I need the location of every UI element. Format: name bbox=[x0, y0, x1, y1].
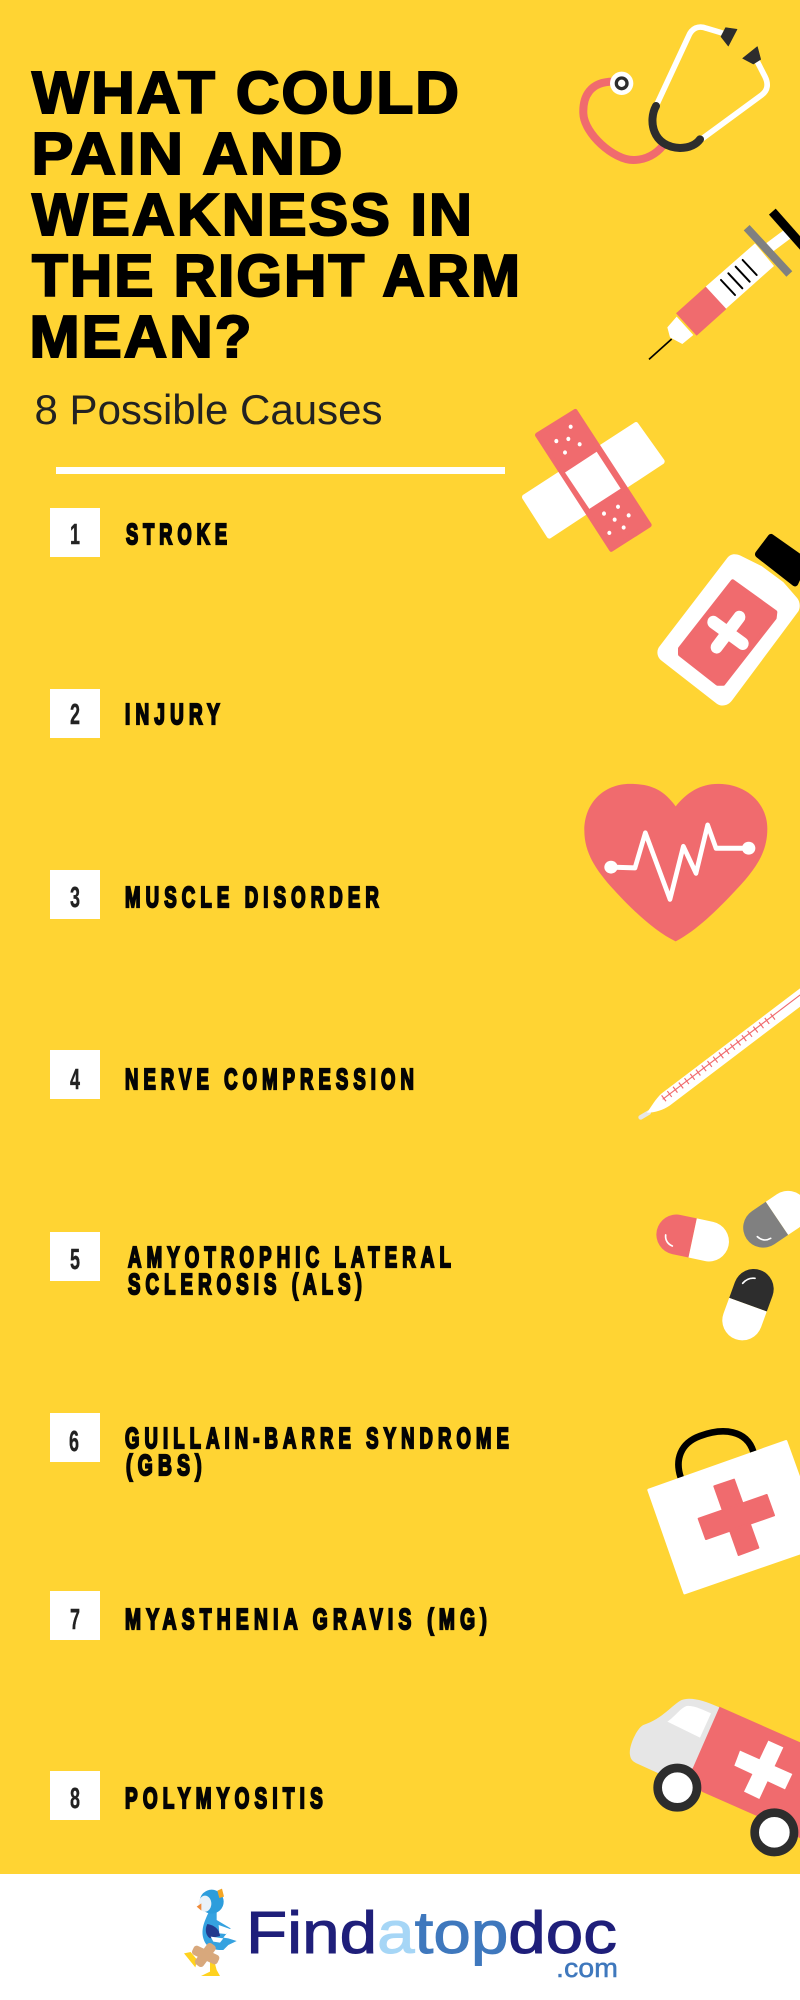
cause 2: injury: 2 bbox=[70, 699, 80, 731]
title: WHAT COULD bbox=[32, 60, 461, 126]
logo: Findatopdoc wordmark: .com bbox=[556, 1953, 618, 1983]
cause 5: amyotrophic lateral sclerosis: AMYOTROPHIC LATERAL bbox=[128, 1242, 456, 1274]
cause 5: amyotrophic lateral sclerosis bbox=[50, 1232, 456, 1301]
cause 1: stroke: STROKE bbox=[126, 519, 232, 551]
logo: Findatopdoc mascot bbox=[184, 1889, 237, 1976]
cause 6: guillain-barre syndrome: GUILLAIN-BARRE SYNDROME bbox=[125, 1423, 514, 1455]
cause 1: stroke: 1 bbox=[70, 519, 80, 551]
icon: grey and white pill bbox=[735, 1183, 800, 1255]
cause 6: guillain-barre syndrome: 6 bbox=[69, 1426, 79, 1458]
icon: medicine bottle bbox=[657, 537, 800, 706]
icon: red and white pill bbox=[653, 1211, 733, 1265]
title: WEAKNESS IN bbox=[32, 182, 474, 248]
icon: ambulance bbox=[630, 1699, 800, 1852]
cause 7: myasthenia gravis: MYASTHENIA GRAVIS (MG) bbox=[125, 1604, 492, 1636]
icon: first aid bag bbox=[649, 1431, 800, 1593]
list of causes bbox=[50, 508, 514, 1820]
icon: stethoscope bbox=[583, 27, 767, 160]
cause 7: myasthenia gravis: 7 bbox=[70, 1604, 80, 1636]
cause 6: guillain-barre syndrome bbox=[50, 1413, 514, 1482]
cause 4: nerve compression bbox=[50, 1050, 419, 1099]
title: PAIN AND bbox=[32, 121, 344, 187]
icon: heart with ECG line bbox=[584, 784, 767, 941]
cause 2: injury bbox=[50, 689, 225, 738]
icon: thermometer bbox=[641, 983, 800, 1117]
cause 8: polymyositis: 8 bbox=[70, 1783, 80, 1815]
cause 5: amyotrophic lateral sclerosis: 5 bbox=[70, 1244, 80, 1276]
cause 3: muscle disorder: MUSCLE DISORDER bbox=[125, 882, 384, 914]
subtitle: 8 Possible Causes bbox=[34, 386, 382, 433]
logo: Findatopdoc wordmark: Find atopdoc bbox=[246, 1900, 617, 1966]
cause 3: muscle disorder: 3 bbox=[70, 882, 80, 914]
cause 5: amyotrophic lateral sclerosis: SCLEROSIS (ALS) bbox=[128, 1269, 367, 1301]
cause 7: myasthenia gravis bbox=[50, 1591, 492, 1640]
footer band bbox=[0, 1874, 800, 2000]
title: THE RIGHT ARM bbox=[32, 243, 522, 309]
icon: syringe bbox=[649, 212, 800, 359]
cause 8: polymyositis: POLYMYOSITIS bbox=[125, 1783, 328, 1815]
cause 8: polymyositis bbox=[50, 1771, 328, 1820]
icon: black and white pill bbox=[717, 1263, 779, 1346]
cause 6: guillain-barre syndrome: (GBS) bbox=[126, 1450, 207, 1482]
icon: bandage bbox=[525, 411, 662, 549]
cause 2: injury: INJURY bbox=[125, 699, 225, 731]
cause 4: nerve compression: NERVE COMPRESSION bbox=[125, 1064, 419, 1096]
title bbox=[30, 60, 522, 370]
cause 1: stroke bbox=[50, 508, 232, 557]
cause 3: muscle disorder bbox=[50, 870, 384, 919]
title: MEAN? bbox=[30, 304, 254, 370]
cause 4: nerve compression: 4 bbox=[70, 1064, 80, 1096]
